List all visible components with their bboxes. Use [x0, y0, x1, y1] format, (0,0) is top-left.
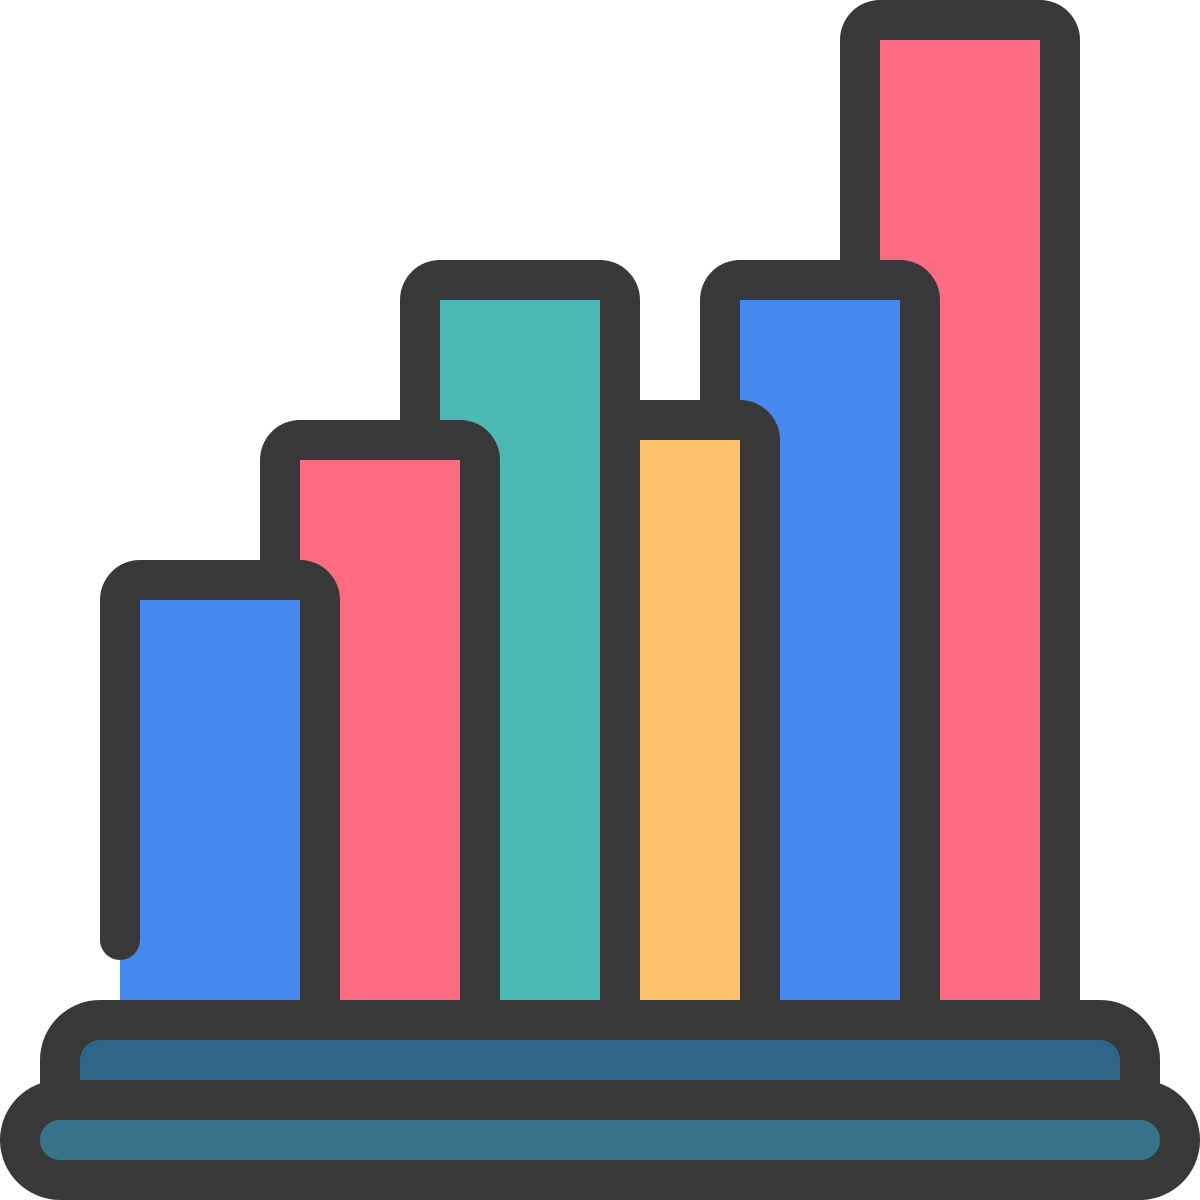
- bar 4: yellow: [620, 420, 760, 1020]
- bar 6: tall pink: [860, 20, 1060, 1020]
- bar 5: blue: [720, 280, 920, 1020]
- bar 1: blue with open left outline: [100, 580, 320, 1020]
- base: upper slab: [60, 1020, 1140, 1100]
- base: lower slab: [20, 1100, 1180, 1180]
- bar 2: pink: [280, 440, 480, 1020]
- bar 3: teal: [420, 280, 620, 1020]
